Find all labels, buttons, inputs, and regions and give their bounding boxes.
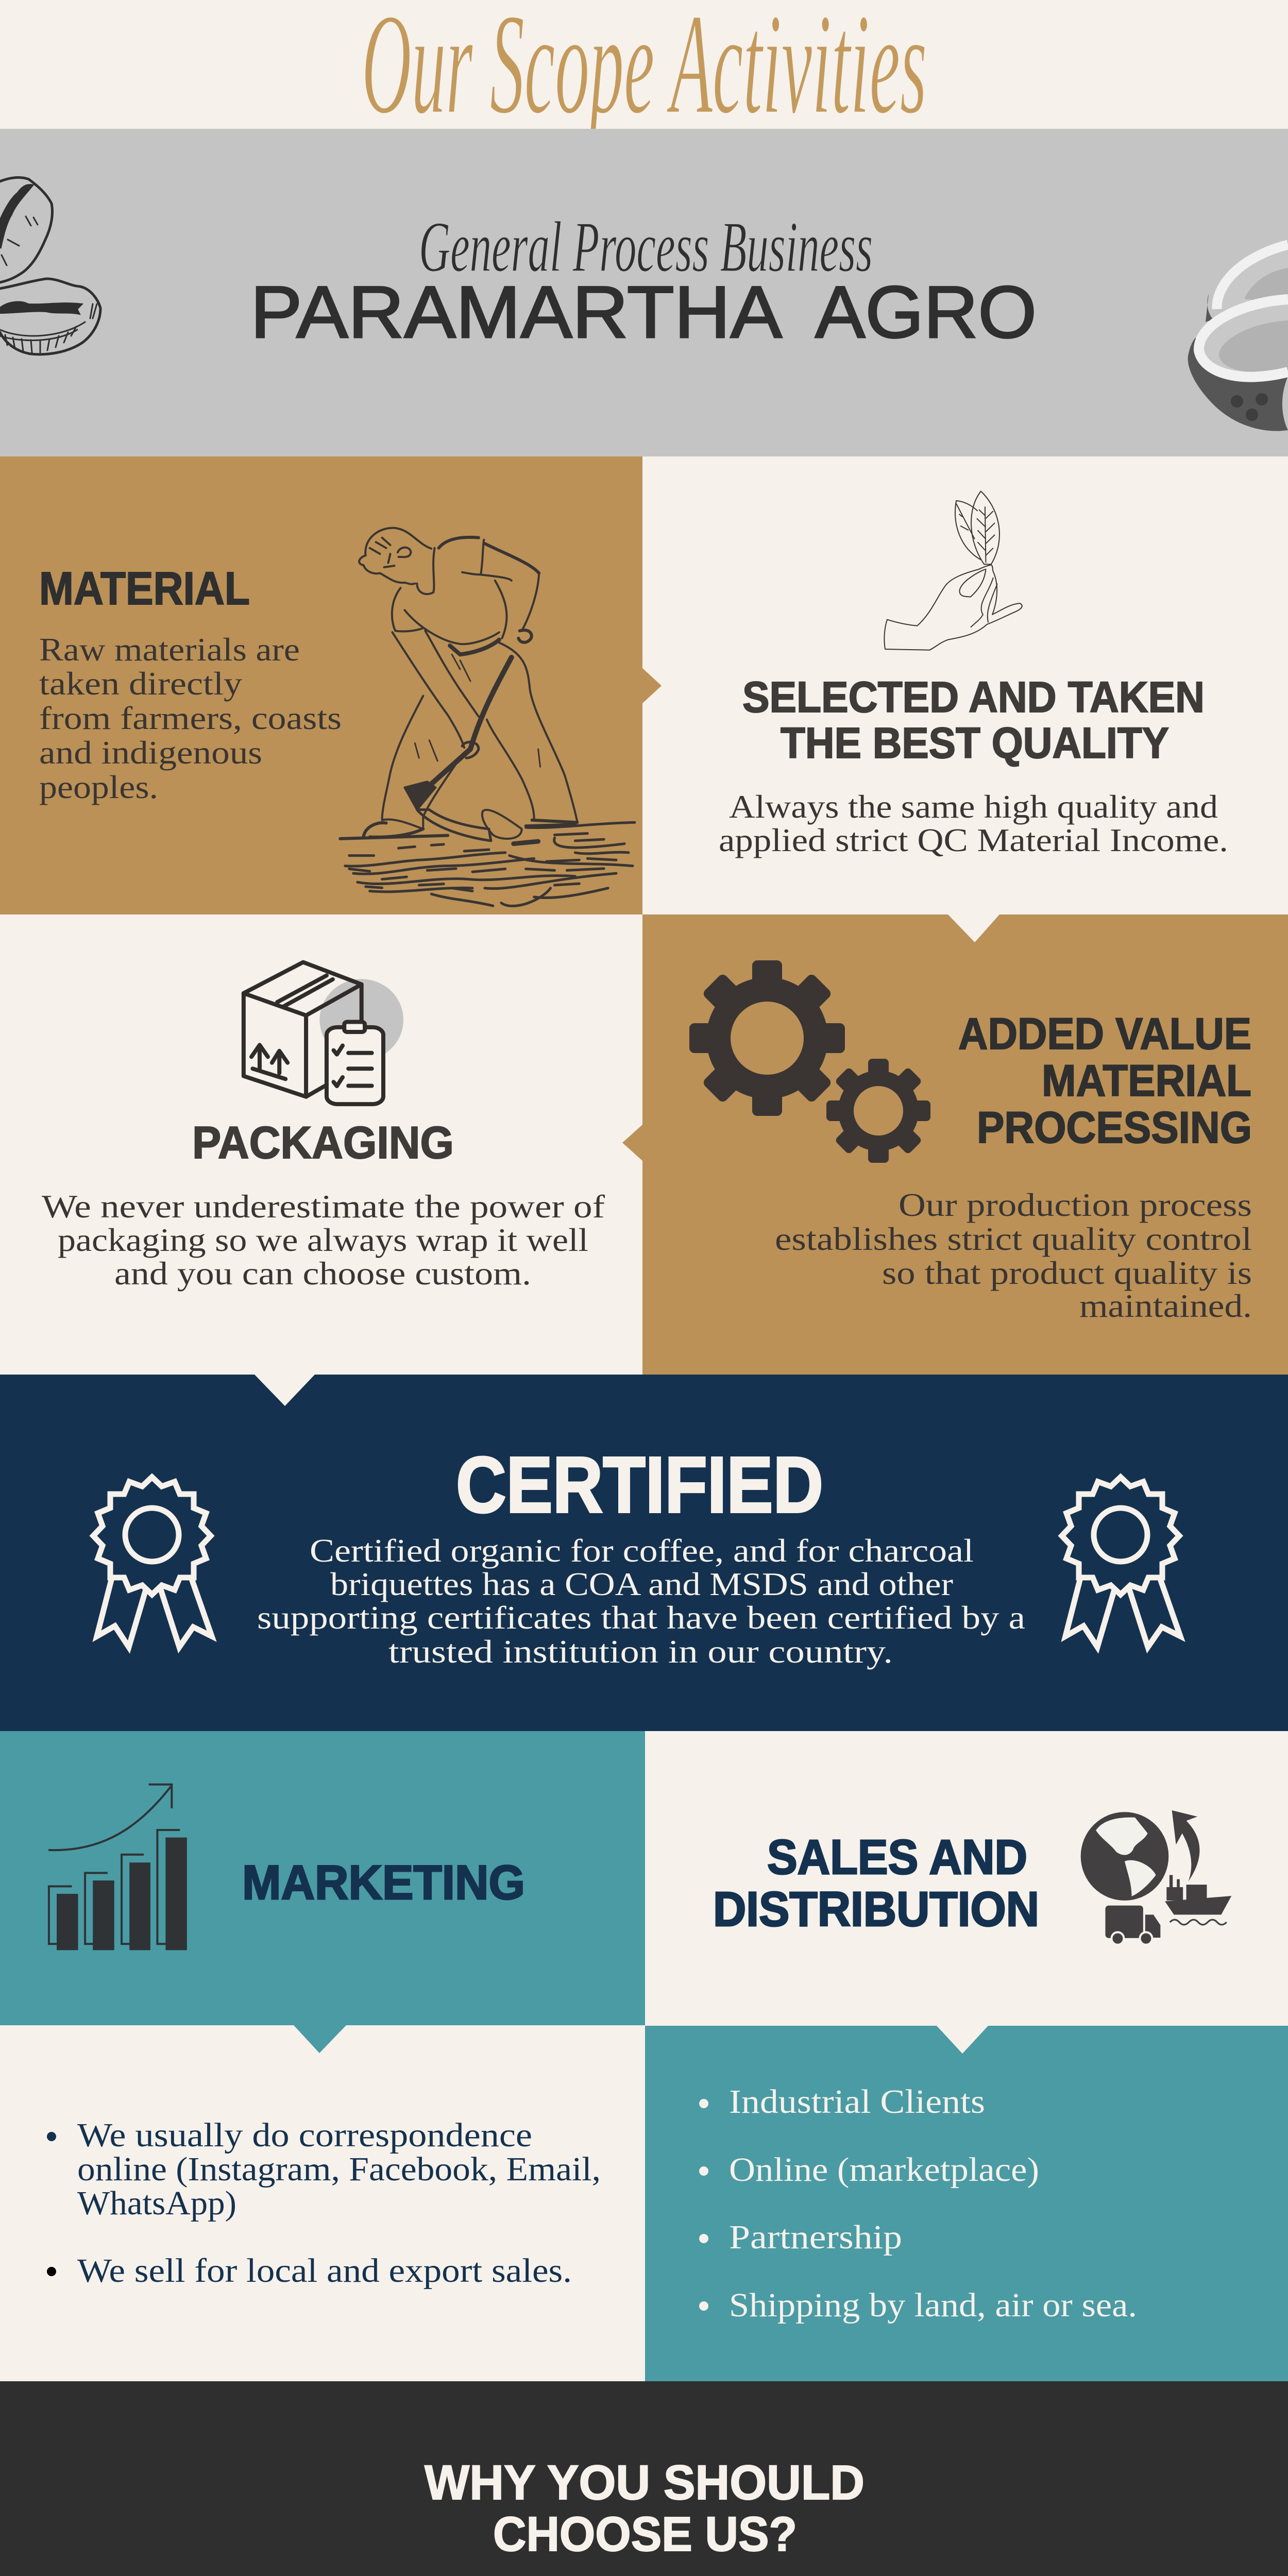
- text: certification description: briquettes has a COA and MSDS and other: [330, 1566, 953, 1602]
- text: certification description: supporting certificates that have been certified by a: [257, 1599, 1025, 1636]
- heading: added value material processing: MATERIAL: [1042, 1056, 1251, 1106]
- heading: sales and distribution: DISTRIBUTION: [713, 1882, 1039, 1937]
- text: material description: and indigenous: [39, 734, 262, 771]
- heading: selected and taken the best quality: [742, 673, 1205, 767]
- text: production description: maintained.: [1079, 1287, 1252, 1324]
- panel: sales and distribution header: [645, 1731, 1288, 2026]
- icon: growth chart: [48, 1785, 187, 1950]
- bullet list: sales channels: Online (marketplace): [729, 2151, 1039, 2189]
- icon: coffee beans: [0, 178, 100, 354]
- arrow: packaging to certified: [255, 1375, 315, 1406]
- icon: coconut halves: [1188, 245, 1288, 431]
- icon: farmer with hoe: [340, 528, 635, 906]
- arrow: material to selected: [642, 668, 662, 704]
- panel: sales list: [645, 2026, 1288, 2381]
- icon: hand holding leaves: [884, 491, 1022, 650]
- heading: selected and taken the best quality: THE BEST QUALITY: [781, 719, 1169, 767]
- text: material description: [39, 631, 342, 805]
- panel: packaging: [0, 914, 642, 1375]
- heading: why you should choose us: WHY YOU SHOULD: [425, 2455, 865, 2510]
- bullet list: sales channels: Industrial Clients: [729, 2083, 985, 2121]
- text: certification description: [257, 1532, 1025, 1670]
- heading: PARAMARTHA AGRO: PARAMARTHA: [250, 272, 783, 353]
- text: material description: taken directly: [39, 665, 242, 702]
- panel: selected and taken: [642, 456, 1288, 914]
- text: quality description: Always the same high quality and: [729, 788, 1218, 825]
- bullet list: marketing channels: We usually do correspondence: [77, 2116, 532, 2154]
- heading: why you should choose us: CHOOSE US?: [493, 2507, 797, 2562]
- arrow: selected to processing: [948, 914, 999, 942]
- panel: added value material processing: [642, 914, 1288, 1375]
- bullet list: marketing channels: We sell for local and export sales.: [77, 2252, 572, 2290]
- text: quality description: [719, 788, 1228, 858]
- heading: why you should choose us: [425, 2455, 865, 2562]
- heading: sales and distribution: SALES AND: [767, 1830, 1027, 1885]
- heading: CERTIFIED: CERTIFIED: [456, 1440, 823, 1529]
- icon: globe truck and ship: [1081, 1810, 1231, 1945]
- heading: added value material processing: ADDED VALUE: [958, 1009, 1251, 1059]
- bullet list: marketing channels: [47, 2116, 601, 2290]
- subtitle: General Process Business: General Process Business: [419, 207, 873, 287]
- icon: box with checklist: [244, 962, 403, 1104]
- panel: company banner: [0, 129, 1288, 456]
- text: production description: establishes strict quality control: [775, 1221, 1252, 1257]
- heading: added value material processing: PROCESSING: [977, 1103, 1252, 1153]
- text: packaging description: [42, 1188, 605, 1292]
- panel: marketing list: [0, 2025, 645, 2381]
- bullet list: sales channels: Partnership: [729, 2218, 902, 2256]
- text: production description: Our production process: [899, 1187, 1252, 1223]
- heading: selected and taken the best quality: SELECTED AND TAKEN: [742, 673, 1205, 721]
- icon: gears: [689, 960, 930, 1163]
- heading: added value material processing: [958, 1009, 1252, 1153]
- panel: marketing header: [0, 1731, 645, 2025]
- bullet list: sales channels: Shipping by land, air or sea.: [729, 2286, 1137, 2324]
- header: title band: [0, 0, 1288, 144]
- icon: award ribbon right: [1062, 1477, 1180, 1647]
- icon: award ribbon left: [93, 1477, 212, 1647]
- text: packaging description: packaging so we always wrap it well: [58, 1222, 588, 1258]
- text: material description: peoples.: [39, 769, 158, 805]
- bullet list: marketing channels: WhatsApp): [77, 2184, 236, 2222]
- text: certification description: trusted institution in our country.: [388, 1633, 893, 1670]
- arrow: marketing to list: [294, 2025, 346, 2053]
- arrow: sales to list: [937, 2026, 988, 2054]
- panel: why choose us: [0, 2381, 1288, 2576]
- bullet list: sales channels: [699, 2083, 1137, 2324]
- heading: PARAMARTHA AGRO: AGRO: [815, 272, 1037, 353]
- arrow: processing to packaging: [622, 1125, 642, 1161]
- text: production description: so that product quality is: [882, 1255, 1252, 1291]
- text: production description: [775, 1187, 1252, 1324]
- text: quality description: applied strict QC Material Income.: [719, 822, 1228, 858]
- heading: MARKETING: MARKETING: [242, 1855, 525, 1909]
- text: packaging description: and you can choose custom.: [114, 1255, 531, 1292]
- heading: PACKAGING: PACKAGING: [192, 1117, 454, 1168]
- heading: MATERIAL: MATERIAL: [39, 563, 250, 615]
- heading: PARAMARTHA AGRO: [250, 272, 1037, 353]
- panel: certified: [0, 1375, 1288, 1731]
- bullet list: marketing channels: online (Instagram, Facebook, Email,: [77, 2150, 601, 2188]
- text: packaging description: We never underestimate the power of: [42, 1188, 605, 1225]
- panel: material: [0, 456, 642, 914]
- heading: sales and distribution: [713, 1830, 1039, 1937]
- text: certification description: Certified organic for coffee, and for charcoal: [310, 1532, 974, 1569]
- text: material description: from farmers, coasts: [39, 700, 342, 736]
- text: material description: Raw materials are: [39, 631, 300, 668]
